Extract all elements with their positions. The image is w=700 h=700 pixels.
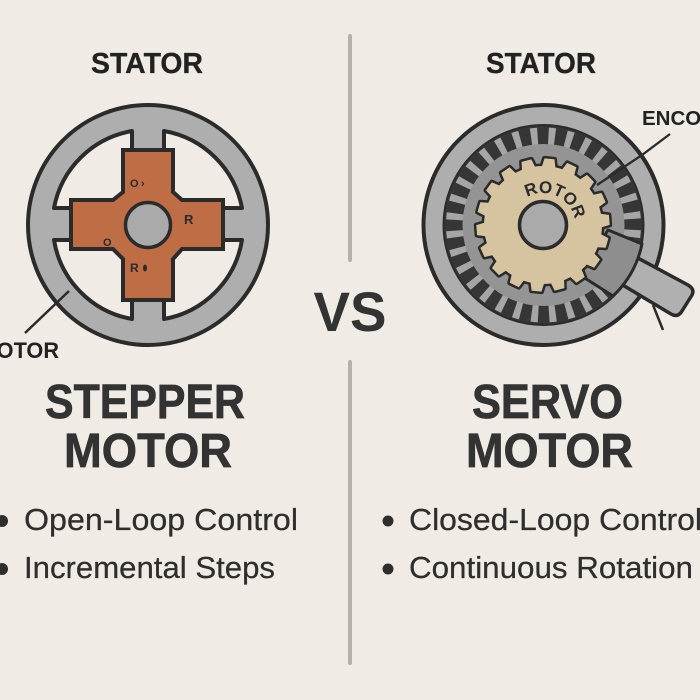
rotor markings: O xyxy=(103,237,112,249)
rotor cross xyxy=(71,150,223,300)
bullet list: servo: Continuous Rotation xyxy=(409,550,693,585)
rotor hub xyxy=(126,202,170,248)
gear outline xyxy=(476,158,610,292)
rotor markings: R xyxy=(130,261,139,275)
heading: servo motor: SERVO xyxy=(472,376,623,429)
heading: stepper motor: MOTOR xyxy=(64,425,232,478)
heading: servo motor xyxy=(466,376,633,478)
rotor markings: R xyxy=(184,212,194,227)
stator teeth xyxy=(450,132,637,318)
stator inner ring xyxy=(462,144,624,306)
label: stator (left): STATOR xyxy=(91,48,203,80)
curved rotor label: ROTOR xyxy=(524,181,585,219)
leader line: rotor xyxy=(25,291,69,333)
bullet list: stepper: Incremental Steps xyxy=(24,550,275,585)
stator windows xyxy=(54,131,242,319)
diagram: servo motor xyxy=(422,103,695,347)
rotor markings xyxy=(103,178,194,275)
dark slot ring xyxy=(444,125,644,325)
rotor markings: › xyxy=(141,178,145,190)
diagram: stepper motor xyxy=(28,105,268,345)
bullet list: stepper: Open-Loop Control xyxy=(24,502,298,537)
bullet list: stepper xyxy=(0,502,298,585)
gear rotor body xyxy=(476,158,610,292)
rotor shaft xyxy=(520,202,566,248)
encoder arm xyxy=(616,256,693,315)
heading: stepper motor xyxy=(45,376,245,478)
stator ring xyxy=(28,105,268,345)
VS label: VS xyxy=(314,280,386,343)
encoder sector xyxy=(580,230,642,296)
divider: lower xyxy=(348,360,352,665)
label: stator (right): STATOR xyxy=(486,48,596,80)
heading: stepper motor: STEPPER xyxy=(45,376,245,429)
divider: upper xyxy=(348,34,352,262)
leader line: arm xyxy=(653,305,663,330)
outer housing ring xyxy=(424,105,664,345)
rotor markings: O xyxy=(130,178,139,190)
panel: stepper motor xyxy=(0,48,298,585)
leader line: encoder xyxy=(597,134,670,185)
panel: servo motor xyxy=(382,48,700,585)
bullet list: servo: Closed-Loop Control xyxy=(409,502,700,537)
bullet list: servo xyxy=(382,502,700,585)
heading: servo motor: MOTOR xyxy=(466,425,633,478)
